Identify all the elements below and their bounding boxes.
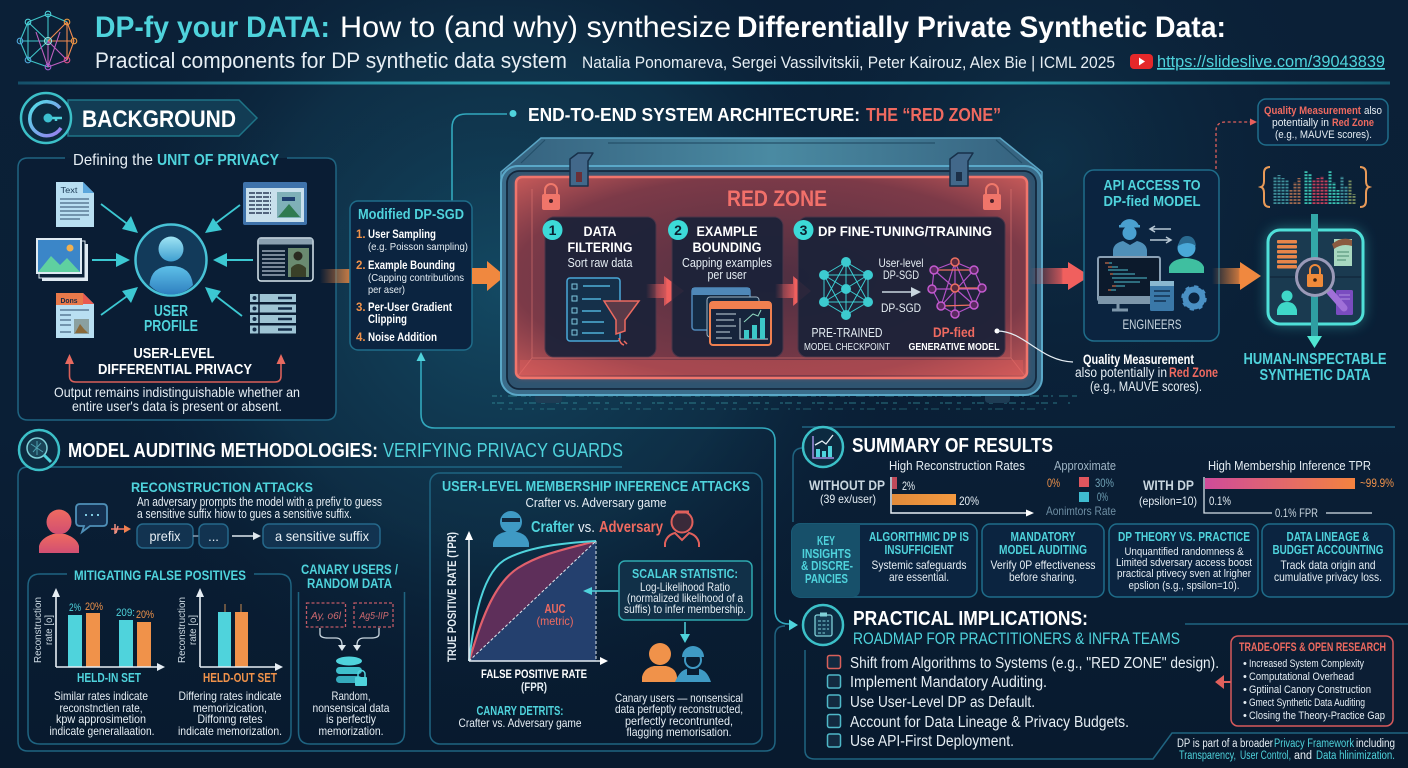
chart: without dp: (39 ex/user) bbox=[820, 492, 876, 506]
list: dp-sgd steps: User Sampling bbox=[368, 229, 436, 241]
callout: trade-offs: Gptiinal Canory Construction bbox=[1249, 684, 1371, 696]
card: mandatory auditing: MODEL AUDITING bbox=[999, 543, 1087, 557]
text: canary details bbox=[458, 704, 582, 730]
card: theory vs practice: practical ptivecy sven at lrigher bbox=[1117, 568, 1251, 580]
chart: without dp: High Reconstruction Rates bbox=[889, 459, 1025, 473]
icon: stacked records bbox=[1277, 240, 1297, 268]
icon: text document bbox=[56, 182, 94, 227]
heading: practical implications: PRACTICAL IMPLICATIONS: bbox=[853, 607, 1088, 630]
panel: api access: API ACCESS TO bbox=[1104, 177, 1201, 194]
legend: approximate: Aonimtors Rate bbox=[1046, 504, 1116, 518]
panel: summary of results bbox=[792, 427, 1395, 597]
checklist: Use User-Level DP as Default. bbox=[850, 694, 1035, 711]
arrow: training transition: DP-SGD bbox=[881, 301, 921, 315]
text: canary note: nonsensical data bbox=[312, 701, 390, 715]
footer note: including bbox=[1356, 738, 1395, 750]
card: mandatory auditing: before sharing. bbox=[1009, 570, 1077, 584]
chart: roc curve: (metric) bbox=[536, 614, 574, 628]
footer note: Privacy Framework bbox=[1274, 738, 1354, 750]
callout: trade-offs: • bbox=[1243, 710, 1247, 722]
card: theory vs practice: DP THEORY VS. PRACTICE bbox=[1118, 530, 1250, 544]
panel: mitigating false positives: MITIGATING FALSE POSITIVES bbox=[74, 568, 246, 583]
list: dp-sgd steps: (e.g. Poisson sampling) bbox=[368, 241, 468, 253]
footer note: DP is part of a broader bbox=[1177, 738, 1273, 750]
panel: mitigating false positives bbox=[28, 568, 291, 744]
label: dp-fied generative model: DP-fied bbox=[933, 325, 975, 340]
text: held-in note bbox=[50, 689, 154, 738]
step 3: dp fine-tuning: 3 bbox=[800, 222, 808, 238]
heading: model auditing: MODEL AUDITING METHODOLOGIES: bbox=[68, 439, 378, 462]
random data boxes: Ag5-IIP bbox=[359, 611, 389, 622]
icon: profile page bbox=[258, 238, 313, 281]
text: held-out note: memorizication, bbox=[193, 701, 267, 715]
card: theory vs practice: Limited sdversary access boost bbox=[1116, 557, 1252, 569]
heading: model auditing bbox=[68, 439, 623, 462]
connectors: dp-sgd links bbox=[421, 114, 789, 624]
icon: exchange arrows bbox=[1150, 226, 1171, 243]
icon: user bbox=[1169, 236, 1204, 273]
icon: person bbox=[1277, 290, 1297, 315]
panel: model auditing bbox=[18, 430, 785, 751]
chart: with dp: (epsilon=10) bbox=[1139, 494, 1197, 508]
step 2: example bounding: per user bbox=[708, 268, 746, 282]
arrow: dp-sgd to red zone bbox=[472, 261, 505, 291]
text: canary note: Random, bbox=[332, 689, 370, 703]
label: pre-trained checkpoint: MODEL CHECKPOINT bbox=[804, 341, 890, 353]
card: mandatory auditing: MANDATORY bbox=[1010, 530, 1076, 544]
icon: network logo bbox=[17, 11, 77, 70]
label: pre-trained checkpoint bbox=[804, 326, 890, 353]
panel: membership inference: USER-LEVEL MEMBERSHIP INFERENCE ATTACKS bbox=[442, 479, 750, 495]
callout: quality measurement top bbox=[1258, 99, 1388, 145]
binary data strip bbox=[492, 396, 1078, 409]
panel: api access: ENGINEERS bbox=[1122, 317, 1182, 332]
arrows: data to user bbox=[92, 204, 253, 316]
callout: quality measurement top: Red Zone bbox=[1332, 117, 1374, 129]
chart: held-in set bbox=[32, 588, 165, 685]
chart: roc curve: TRUE POSITIVE RATE (TPR) bbox=[445, 532, 459, 662]
chart: held-in set: rate [o] bbox=[43, 615, 55, 645]
icon: lock right bbox=[983, 184, 1001, 210]
heading: unit of privacy bbox=[73, 152, 279, 169]
chart: without dp: 2% bbox=[902, 479, 915, 493]
label: crafter vs adversary: vs. bbox=[578, 519, 595, 536]
heading: unit of privacy: UNIT OF PRIVACY bbox=[157, 152, 279, 169]
card: key insights: are essential. bbox=[889, 570, 949, 584]
icon: video play bbox=[1130, 54, 1153, 69]
heading: user-level differential privacy bbox=[98, 345, 252, 378]
heading icon: chart bbox=[803, 427, 843, 467]
chart: held-in set: 20% bbox=[85, 601, 103, 613]
card: key insights: Systemic safeguards bbox=[872, 558, 966, 572]
step 1: data filtering: FILTERING bbox=[568, 240, 632, 255]
callout: trade-offs: Gmect Synthetic Data Auditing bbox=[1249, 697, 1365, 709]
callout: scalar statistic bbox=[619, 561, 752, 620]
footer note: and bbox=[1294, 750, 1312, 762]
callout: quality measurement: (e.g., MAUVE scores). bbox=[1090, 379, 1202, 394]
step 1: data filtering: Sort raw data bbox=[568, 256, 633, 270]
heading: summary: SUMMARY OF RESULTS bbox=[852, 434, 1053, 457]
callout: trade-offs: Increased System Complexity bbox=[1249, 658, 1364, 670]
text: canary details: CANARY DETRITS: bbox=[476, 704, 564, 718]
text: canary explanation: perfectly recontrunted, bbox=[625, 714, 733, 728]
icon: monitor bbox=[1098, 257, 1160, 310]
link: https://slideslive.com/39043839 bbox=[1157, 52, 1385, 71]
card: key insights: & DISCRE- bbox=[801, 559, 853, 573]
icon: document bbox=[1150, 281, 1174, 311]
callout: scalar statistic: SCALAR STATISTIC: bbox=[632, 566, 738, 581]
arrow: training transition: DP-SGD bbox=[883, 268, 919, 282]
heading: end-to-end architecture: THE “RED ZONE” bbox=[866, 105, 1001, 125]
step 1: data filtering: 1 bbox=[549, 222, 557, 238]
text: canary explanation: Canary users — nonsensical bbox=[615, 691, 743, 705]
label: user profile: PROFILE bbox=[144, 318, 198, 335]
list: dp-sgd steps: Example Bounding bbox=[368, 260, 455, 272]
list: dp-sgd steps: Per-User Gradient bbox=[368, 302, 452, 314]
chart: with dp: WITH DP bbox=[1143, 478, 1194, 493]
heading: practical implications bbox=[853, 607, 1180, 648]
list: dp-sgd steps: 4. bbox=[356, 332, 366, 344]
text: canary explanation bbox=[615, 691, 743, 739]
step 1: data filtering: DATA bbox=[584, 224, 617, 239]
card: data lineage: DATA LINEAGE & bbox=[1286, 530, 1370, 544]
icon: data columns in braces bbox=[1261, 167, 1369, 207]
red zone container bbox=[501, 138, 1042, 403]
checklist: Shift from Algorithms to Systems (e.g., "RED ZONE" design). bbox=[850, 655, 1219, 672]
icon: dons document bbox=[56, 293, 94, 338]
callout: scalar statistic: suffis) to infer membership. bbox=[624, 602, 746, 616]
panel: modified dp-sgd bbox=[350, 201, 472, 350]
card: key insights: ALGORITHMIC DP IS bbox=[869, 530, 969, 544]
chart: held-in set: Reconstruction bbox=[32, 597, 44, 663]
chart: roc curve: FALSE POSITIVE RATE bbox=[481, 667, 587, 681]
card: data lineage bbox=[1262, 524, 1394, 597]
card: key insights: PANCIES bbox=[805, 572, 848, 586]
random data boxes bbox=[306, 603, 393, 627]
prompt boxes bbox=[137, 524, 380, 548]
text: canary details: Crafter vs. Adversary game bbox=[458, 716, 582, 730]
panel: modified dp-sgd: Modified DP-SGD bbox=[358, 206, 464, 223]
legend: approximate: 0% bbox=[1047, 476, 1060, 490]
arrow: api to synthetic data bbox=[1212, 262, 1261, 290]
connector ends bbox=[416, 110, 798, 630]
label: crafter vs adversary bbox=[531, 519, 663, 536]
text: held-in note: Similar rates indicate bbox=[54, 689, 148, 703]
legend: approximate: 0% bbox=[1097, 490, 1108, 504]
clasps bbox=[570, 153, 973, 186]
card: key insights: KEY bbox=[817, 534, 835, 548]
footer note: Transparency, bbox=[1179, 750, 1236, 762]
label: user profile bbox=[144, 303, 198, 335]
callout: scalar statistic: (normalized likelihood of a bbox=[627, 591, 743, 605]
section: reconstruction attacks bbox=[39, 479, 382, 553]
panel: canary users: CANARY USERS / bbox=[301, 562, 398, 577]
frame lines bbox=[793, 427, 1395, 522]
arrow: trade-offs to checklist bbox=[1215, 675, 1231, 689]
card: mandatory auditing: Verify 0P effectiveness bbox=[990, 558, 1096, 572]
icon: gear bbox=[1183, 287, 1205, 309]
list: dp-sgd steps: per aser) bbox=[368, 284, 405, 296]
callout: quality measurement top: potentially in bbox=[1272, 117, 1329, 129]
heading: end-to-end architecture: END-TO-END SYSTEM ARCHITECTURE: bbox=[528, 105, 860, 125]
icon: chat bubble bbox=[76, 504, 107, 532]
dashed arrow to callout bbox=[1216, 118, 1257, 169]
legend: approximate bbox=[1046, 459, 1116, 518]
panel: canary users bbox=[298, 562, 404, 744]
panel: membership inference bbox=[430, 473, 762, 744]
icon: crafter bbox=[493, 511, 529, 547]
description bbox=[54, 384, 300, 414]
red zone panel bbox=[516, 177, 1027, 378]
arrow: prompt bbox=[111, 524, 131, 534]
flow arrow: unit of privacy to dp-sgd bbox=[320, 269, 351, 283]
label: pre-trained checkpoint: PRE-TRAINED bbox=[812, 326, 882, 340]
icon: database with lock bbox=[336, 656, 367, 686]
chart: with dp: 0.1% FPR bbox=[1275, 506, 1318, 520]
panel: human-inspectable synthetic data bbox=[1244, 214, 1386, 384]
chart: with dp bbox=[1139, 459, 1394, 520]
checklist: Use API-First Deployment. bbox=[850, 733, 1014, 750]
list: dp-sgd steps bbox=[356, 229, 468, 344]
heading: human-inspectable: SYNTHETIC DATA bbox=[1260, 367, 1370, 384]
heading icon: magnifier bbox=[19, 430, 59, 470]
heading: user-level differential privacy: DIFFERENTIAL PRIVACY bbox=[98, 361, 252, 378]
step 3: dp fine-tuning: DP FINE-TUNING/TRAINING bbox=[818, 224, 992, 239]
checklist: Implement Mandatory Auditing. bbox=[850, 674, 1047, 691]
callout: quality measurement top: also bbox=[1364, 105, 1382, 117]
chart: roc curve bbox=[445, 531, 608, 694]
heading banner: background bbox=[21, 93, 257, 143]
heading: unit of privacy: Defining the bbox=[73, 152, 153, 169]
footer note: User Control, bbox=[1240, 750, 1291, 762]
callout: trade-offs: • bbox=[1243, 671, 1247, 683]
text: canary note: memorization. bbox=[318, 724, 384, 738]
icon: canary users bbox=[642, 643, 711, 682]
icon: engineer bbox=[1113, 219, 1147, 256]
chart: held-in set: 20% bbox=[136, 609, 154, 621]
frame lines bbox=[805, 624, 1408, 759]
card: key insights: INSIGHTS bbox=[802, 547, 851, 561]
prompt boxes: prefix bbox=[150, 528, 180, 544]
text: canary explanation: data perfeptly reconstructed, bbox=[615, 702, 743, 716]
chart: without dp bbox=[809, 459, 1034, 516]
step 2: example bounding: 2 bbox=[674, 222, 682, 238]
heading icon: clipboard bbox=[803, 605, 843, 645]
chart: without dp: WITHOUT DP bbox=[809, 478, 885, 493]
chart: held-out set: Reconstruction bbox=[176, 597, 188, 663]
arrow: step 2 to 3 bbox=[775, 276, 811, 306]
random data boxes: Ay, o6l bbox=[310, 611, 342, 622]
section: reconstruction attacks: RECONSTRUCTION ATTACKS bbox=[131, 479, 313, 495]
chart: with dp: High Membership Inference TPR bbox=[1208, 459, 1371, 473]
step 2: example bounding bbox=[668, 217, 783, 357]
card: data lineage: cumulative privacy loss. bbox=[1274, 570, 1382, 584]
footer note: Data hlinimization. bbox=[1316, 750, 1395, 762]
label: dp-fied generative model bbox=[908, 325, 1000, 353]
chart: held-in set: HELD-IN SET bbox=[77, 671, 141, 685]
section: reconstruction attacks: a sensitive suffix hiow to gues a sensitive suffix. bbox=[137, 507, 352, 521]
label: user profile: USER bbox=[154, 303, 188, 320]
arrow: step 1 to 2 bbox=[646, 276, 684, 306]
icon: paper bbox=[1332, 239, 1352, 266]
text: held-out note: Diffonng retes bbox=[198, 712, 262, 726]
step 2: example bounding: Capping examples bbox=[682, 256, 772, 270]
callout: trade-offs bbox=[1231, 636, 1393, 726]
outer frame bbox=[18, 467, 785, 751]
callout: trade-offs: Computational Overhead bbox=[1249, 671, 1354, 683]
chart: roc curve: AUC bbox=[544, 601, 566, 616]
chart: roc curve: (FPR) bbox=[521, 680, 547, 694]
case lid bbox=[501, 138, 1042, 190]
icon: purple document bbox=[1336, 290, 1353, 315]
card: key insights bbox=[792, 524, 977, 597]
heading banner: background: BACKGROUND bbox=[82, 106, 236, 133]
heading: model auditing: VERIFYING PRIVACY GUARDS bbox=[383, 439, 623, 462]
panel: api access bbox=[1084, 170, 1219, 341]
text: held-in note: indicate generallaation. bbox=[50, 724, 154, 738]
panel: api access: DP-fied MODEL bbox=[1104, 193, 1200, 210]
step 2: example bounding: EXAMPLE bbox=[696, 224, 758, 239]
heading: human-inspectable bbox=[1244, 351, 1386, 384]
text: held-in note: kpw approsimetion bbox=[56, 712, 146, 726]
icon: bounded windows bbox=[692, 288, 771, 345]
icon: dons document: Dons bbox=[60, 296, 78, 305]
title: Differentially Private Synthetic Data: bbox=[737, 11, 1226, 44]
callout: quality measurement: Red Zone bbox=[1169, 365, 1218, 380]
icon: teal network bbox=[819, 257, 873, 320]
list: dp-sgd steps: Noise Addition bbox=[368, 332, 437, 344]
arrow: statistic to auc bbox=[583, 587, 619, 595]
icon: adversary bbox=[665, 512, 699, 547]
callout: trade-offs: • bbox=[1243, 684, 1247, 696]
list: dp-sgd steps: Clipping bbox=[368, 314, 407, 326]
text: held-out note: Differing rates indicate bbox=[178, 689, 282, 703]
label: dp-fied generative model: GENERATIVE MODEL bbox=[908, 341, 1000, 353]
header bbox=[17, 11, 1385, 73]
card: data lineage: Track data origin and bbox=[1280, 558, 1376, 572]
title: How to (and why) synthesize bbox=[340, 11, 731, 44]
text: held-in note: reconstnctien rate, bbox=[60, 701, 142, 715]
chart: held-out set: rate [o] bbox=[187, 615, 199, 645]
step 1: data filtering bbox=[542, 217, 656, 357]
step 3: dp fine-tuning bbox=[794, 217, 1005, 357]
callout: quality measurement: also potentially in bbox=[1075, 365, 1167, 380]
list: dp-sgd steps: 3. bbox=[356, 302, 366, 314]
prompt boxes: a sensitive suffix bbox=[275, 528, 369, 544]
description: Output remains indistinguishable whether an bbox=[54, 384, 300, 400]
list: dp-sgd steps: (Capping contributions bbox=[368, 272, 464, 284]
legend: approximate: Approximate bbox=[1054, 459, 1116, 473]
prompt boxes: ... bbox=[208, 529, 219, 544]
callout: trade-offs: • bbox=[1243, 697, 1247, 709]
checklist: Account for Data Lineage & Privacy Budgets. bbox=[850, 714, 1129, 731]
arrow: training transition bbox=[878, 256, 924, 315]
chart: held-in set: 2% bbox=[69, 602, 81, 614]
panel: membership inference: Crafter vs. Adversary game bbox=[526, 495, 666, 510]
description: entire user's data is present or absent. bbox=[72, 398, 282, 414]
authors: Natalia Ponomareva, Sergei Vassilvitskii, Peter Kairouz, Alex Bie | ICML 2025 bbox=[582, 54, 1115, 72]
card: key insights: INSUFFICIENT bbox=[884, 543, 954, 557]
label: crafter vs adversary: Adversary bbox=[599, 519, 663, 536]
arrows: to database bbox=[320, 628, 379, 651]
icon: image stack bbox=[36, 238, 88, 281]
heading: user-level differential privacy: USER-LEVEL bbox=[134, 345, 214, 362]
chart: with dp: ~99.9% bbox=[1360, 476, 1394, 490]
icon: web article bbox=[243, 182, 307, 225]
heading: red zone: RED ZONE bbox=[727, 186, 827, 211]
panel: canary users: RANDOM DATA bbox=[307, 576, 392, 591]
icon: server list bbox=[250, 294, 296, 334]
heading: practical implications: ROADMAP FOR PRACTITIONERS & INFRA TEAMS bbox=[853, 630, 1180, 648]
icon: lock left bbox=[542, 184, 560, 210]
card: mandatory auditing bbox=[982, 524, 1104, 597]
arrow: red zone to api bbox=[1030, 262, 1090, 290]
chart: held-in set: 209: bbox=[116, 607, 135, 619]
icon: magnifier with lock bbox=[1296, 258, 1344, 308]
callout: trade-offs: Closing the Theory-Practice Gap bbox=[1249, 710, 1385, 722]
legend: approximate: 30% bbox=[1095, 476, 1114, 490]
callout: trade-offs: • bbox=[1243, 658, 1247, 670]
footer note bbox=[1177, 738, 1395, 762]
chart: without dp: 20% bbox=[959, 494, 979, 508]
step 2: example bounding: BOUNDING bbox=[692, 240, 762, 255]
text: canary note bbox=[312, 689, 390, 738]
panel: background bbox=[18, 93, 336, 420]
callout: quality measurement: Quality Measurement bbox=[1083, 352, 1194, 367]
list: dp-sgd steps: 2. bbox=[356, 260, 366, 272]
checklist bbox=[828, 655, 1219, 750]
text: held-out note bbox=[178, 689, 282, 738]
section: reconstruction attacks: An adversary prompts the model with a prefiv to guess bbox=[137, 495, 382, 509]
icon: attacker bbox=[39, 510, 79, 553]
bracket arrow bbox=[65, 354, 286, 382]
callout: quality measurement bbox=[994, 328, 1218, 394]
card: theory vs practice: Unquantified randomness & bbox=[1124, 546, 1244, 558]
chart: held-out set bbox=[176, 588, 283, 685]
text: canary explanation: flagging memorisation. bbox=[626, 725, 732, 739]
card: theory vs practice bbox=[1109, 524, 1258, 597]
card: theory vs practice: epslion (s.g., spsilon=10). bbox=[1128, 580, 1240, 592]
panel: practical implications bbox=[803, 605, 1408, 762]
text: canary note: is perfectiy bbox=[326, 712, 376, 726]
case feet bbox=[535, 394, 1010, 403]
callout: quality measurement top: (e.g., MAUVE scores). bbox=[1275, 129, 1372, 141]
red zone glow bbox=[516, 177, 1027, 378]
icon: user profile bbox=[136, 224, 206, 296]
title: DP-fy your DATA: bbox=[95, 11, 330, 44]
icon: text document: Text bbox=[60, 186, 78, 195]
unit of privacy box bbox=[18, 158, 336, 420]
arrow: statistic to canary bbox=[680, 622, 690, 643]
chart: with dp: 0.1% bbox=[1209, 494, 1231, 508]
text: held-out note: indicate memorization. bbox=[178, 724, 282, 738]
icon: purple network bbox=[928, 258, 986, 318]
callout: quality measurement top: Quality Measurement bbox=[1264, 105, 1361, 117]
icon: document with funnel bbox=[567, 278, 639, 345]
label: crafter vs adversary: Crafter bbox=[531, 519, 574, 536]
title bbox=[95, 11, 1226, 44]
chart: held-out set: HELD-OUT SET bbox=[203, 671, 277, 685]
list: dp-sgd steps: 1. bbox=[356, 229, 366, 241]
arrow: training transition: User-level bbox=[878, 256, 924, 270]
callout: scalar statistic: Log-Likelihood Ratio bbox=[640, 580, 730, 594]
subtitle: Practical components for DP synthetic data system bbox=[95, 48, 567, 73]
case body bbox=[501, 166, 1042, 395]
